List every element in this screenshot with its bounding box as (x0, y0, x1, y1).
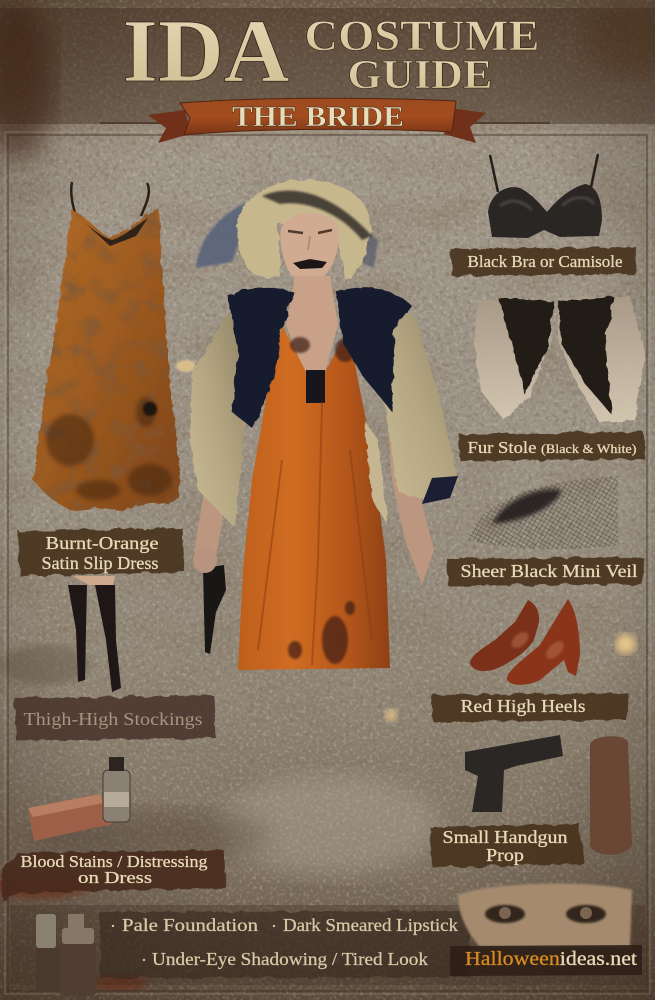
label: small handgun prop: Small Handgun (442, 827, 568, 847)
item: black bra (488, 154, 602, 238)
item: handgun and bottle prop (465, 735, 632, 855)
label: blood stains: Blood Stains / Distressing (20, 852, 208, 871)
label: thigh-high stockings: Thigh-High Stockings (24, 709, 202, 729)
revolver (203, 565, 226, 654)
label: blood stains: on Dress (78, 868, 152, 887)
label: sheer black mini veil (447, 557, 643, 586)
title words: costume guide: GUIDE (348, 51, 492, 97)
item: fur stole (474, 296, 645, 423)
item: red high heels (470, 599, 580, 685)
label: thigh-high stockings (14, 696, 216, 741)
neck and chest (286, 276, 338, 376)
makeup strip (10, 884, 647, 996)
item: sheer black veil (468, 476, 618, 549)
label: blood stains (2, 850, 226, 900)
arms (194, 400, 246, 568)
site band (450, 945, 642, 976)
central figure: the bride (190, 180, 458, 670)
label: black bra or camisole (451, 247, 636, 276)
makeup text: · (141, 950, 147, 970)
title (122, 2, 540, 101)
title words: costume guide: COSTUME (304, 13, 540, 60)
makeup text: Pale Foundation (122, 915, 258, 935)
label: fur stole: Fur Stole (Black & White) (468, 438, 636, 457)
label: fur stole (459, 432, 645, 461)
icon: makeup bottles (36, 914, 96, 996)
eyes close-up (458, 884, 632, 947)
label: burnt-orange satin slip dress (18, 528, 185, 576)
site credit: Halloween ideas.net (465, 948, 637, 970)
label: small handgun prop: Prop (486, 845, 524, 865)
label: burnt-orange satin slip dress: Burnt-Orange (46, 533, 159, 553)
orange dress (238, 325, 390, 670)
makeup text: · (110, 916, 116, 936)
label: small handgun prop (430, 824, 584, 867)
makeup text: Under-Eye Shadowing / Tired Look (152, 949, 428, 969)
title words: costume guide (304, 13, 540, 97)
label: black bra or camisole: Black Bra or Camisole (468, 252, 622, 271)
makeup text: · (271, 916, 277, 936)
veil and hat (196, 198, 378, 268)
item: brick and blood bottle (28, 757, 130, 841)
label: sheer black mini veil: Sheer Black Mini Veil (460, 561, 638, 581)
makeup text (110, 915, 458, 970)
ribbon banner: the bride (100, 98, 550, 143)
label: red high heels: Red High Heels (460, 696, 586, 716)
hair (237, 180, 371, 280)
item: burnt-orange slip dress (33, 182, 180, 510)
makeup text: Dark Smeared Lipstick (283, 915, 458, 935)
face (280, 213, 338, 282)
fur stole: cream sleeves (190, 298, 458, 528)
banner text: THE BRIDE (232, 101, 404, 133)
item: stockings (68, 576, 121, 692)
fur stole: navy inner (228, 288, 412, 428)
label: red high heels (432, 693, 628, 722)
label: burnt-orange satin slip dress: Satin Slip Dress (42, 553, 158, 573)
title word: IDA: IDA (122, 2, 290, 101)
